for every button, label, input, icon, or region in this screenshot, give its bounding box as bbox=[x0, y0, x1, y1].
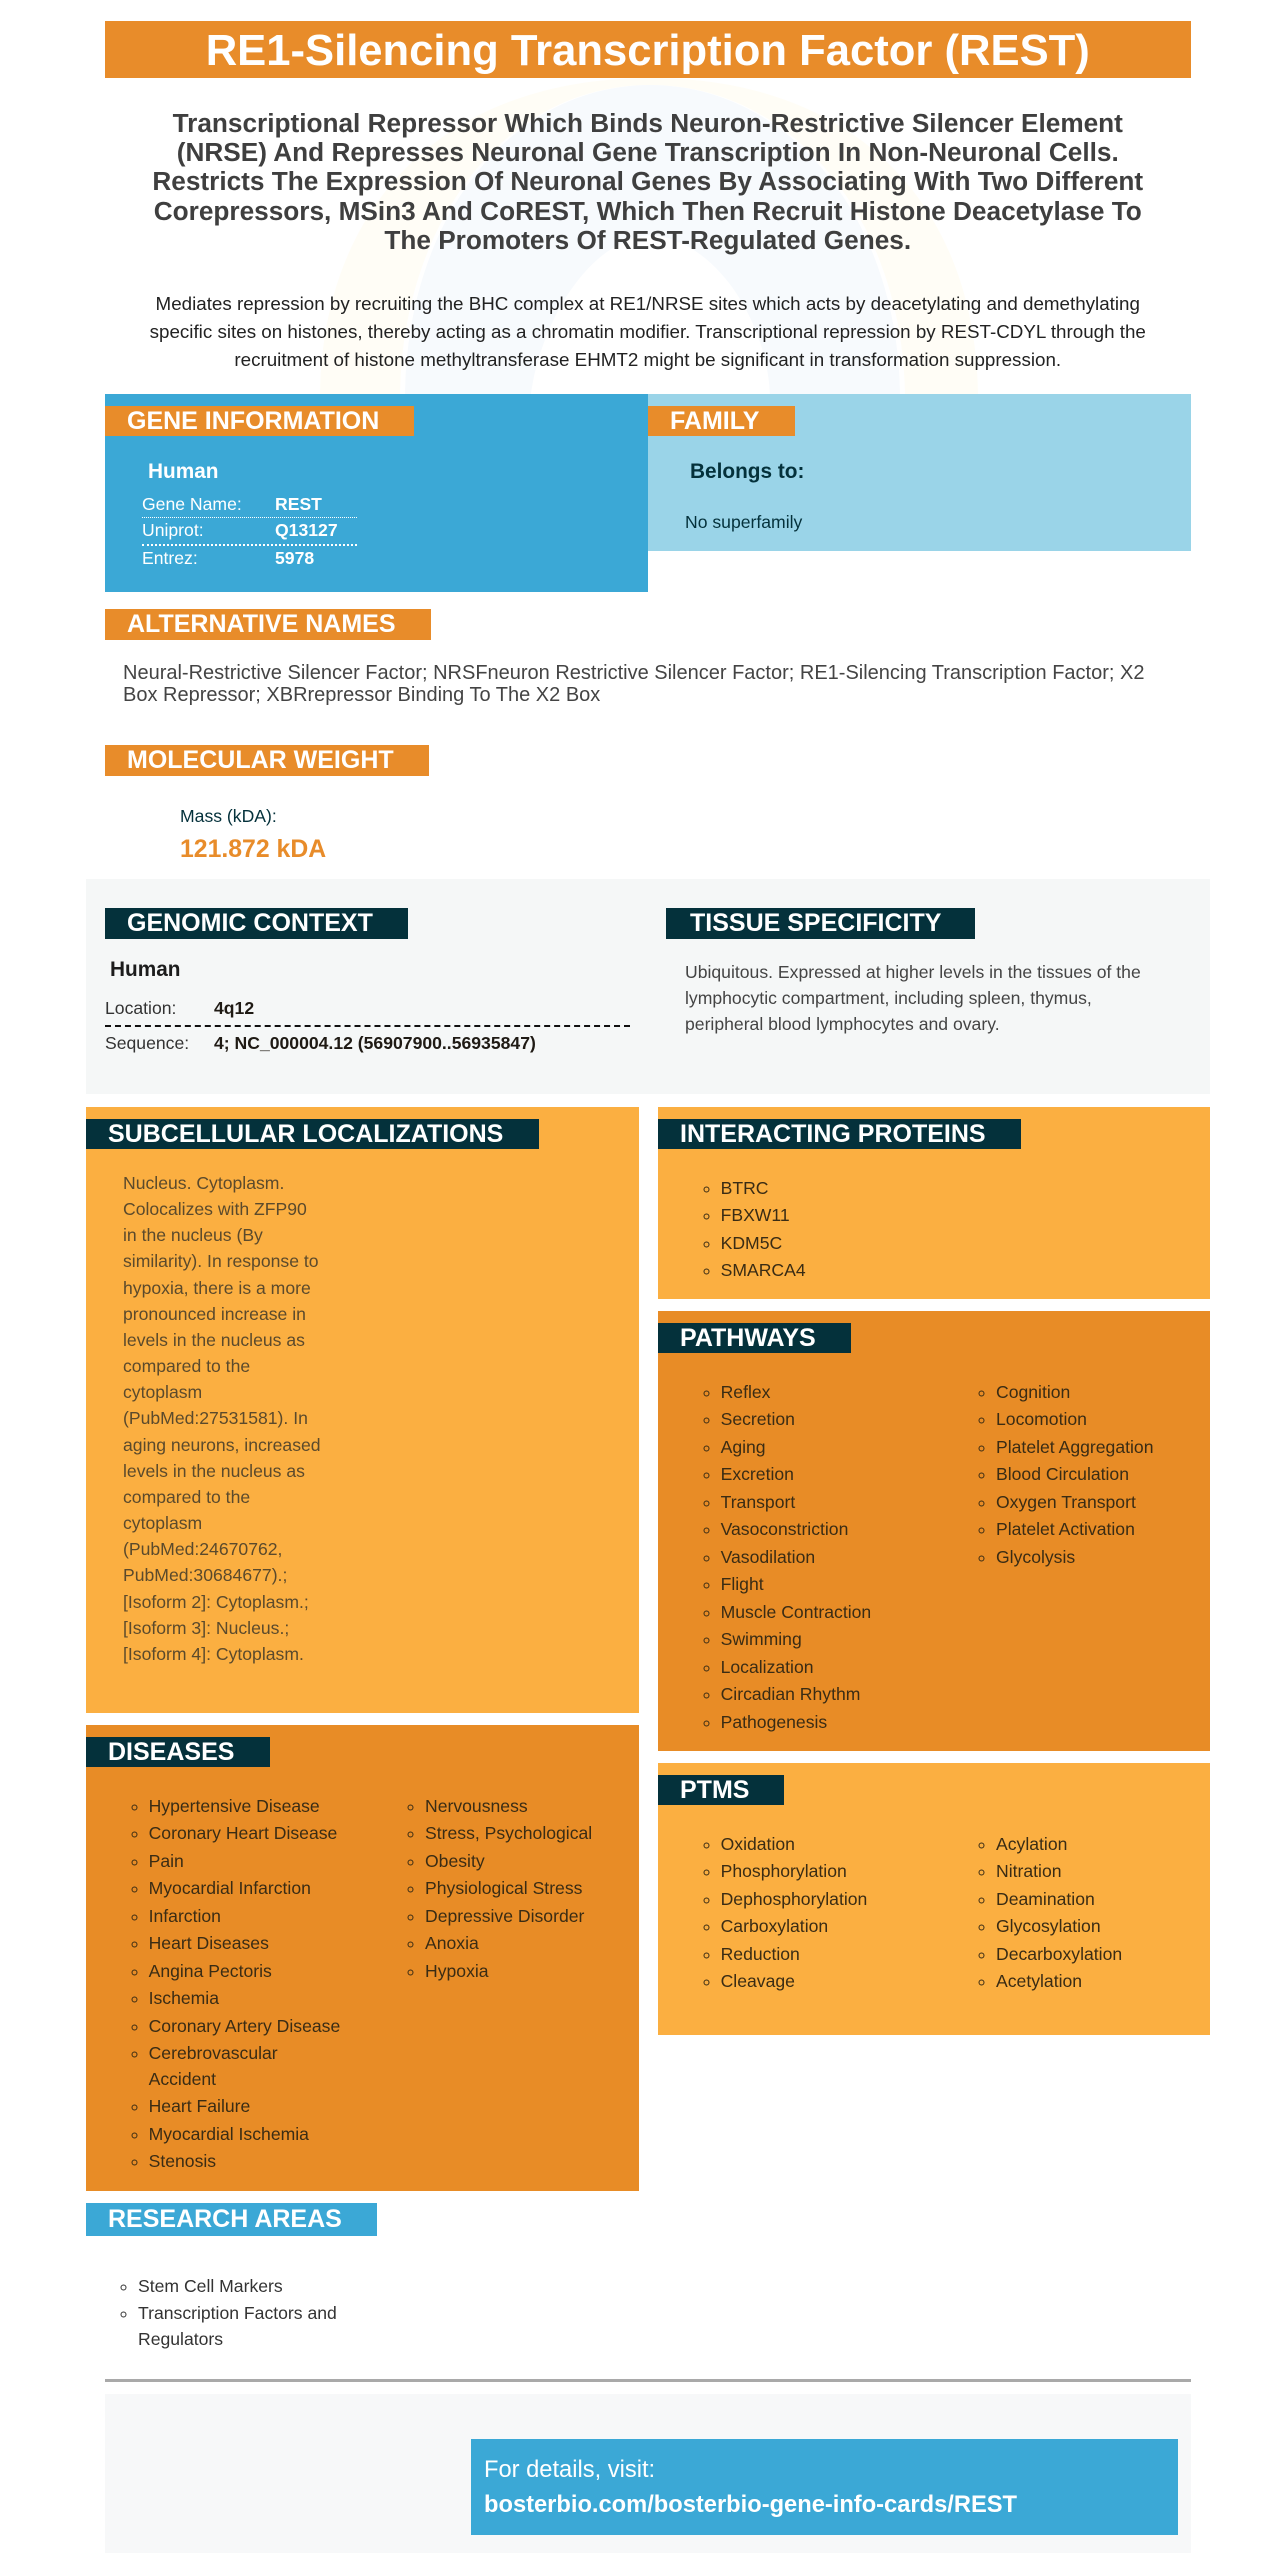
dashed divider bbox=[105, 1024, 630, 1026]
location row bbox=[105, 998, 254, 1018]
mass value: 121.872 kDA bbox=[180, 836, 326, 862]
pathway list column 1: Aging bbox=[721, 1437, 766, 1457]
localization text: levels in the nucleus as bbox=[123, 1330, 305, 1350]
localization text: similarity). In response to bbox=[123, 1251, 319, 1271]
heading: diseases: DISEASES bbox=[108, 1738, 234, 1766]
uniprot row bbox=[142, 520, 357, 546]
pathway list column 1: Vasodilation bbox=[721, 1547, 815, 1567]
localization text bbox=[123, 1173, 321, 1664]
localization text: levels in the nucleus as bbox=[123, 1461, 305, 1481]
alternative names text bbox=[123, 662, 1144, 706]
pathway list column 2: Oxygen Transport bbox=[996, 1492, 1136, 1512]
heading: alternative names: ALTERNATIVE NAMES bbox=[127, 610, 396, 638]
tissue specificity text: peripheral blood lymphocytes and ovary. bbox=[685, 1014, 1000, 1034]
heading: pathways bbox=[658, 1323, 851, 1353]
subtitle: The Promoters Of REST-Regulated Genes. bbox=[384, 225, 911, 255]
disease list column 1: Coronary Heart Disease bbox=[149, 1823, 337, 1843]
disease list column 1: Ischemia bbox=[149, 1988, 219, 2008]
description paragraph: recruitment of histone methyltransferase EHMT2 might be significant in transformation suppression. bbox=[234, 349, 1061, 370]
panel: pathways bbox=[658, 1311, 1210, 1751]
heading: pathways: PATHWAYS bbox=[680, 1324, 816, 1352]
disease list column 2: Physiological Stress bbox=[425, 1878, 582, 1898]
sequence row bbox=[105, 1033, 536, 1053]
url: bosterbio.com/bosterbio-gene-info-cards/REST bbox=[484, 2492, 1017, 2518]
disease list column 2: Hypoxia bbox=[425, 1961, 489, 1981]
heading: ptms: PTMS bbox=[680, 1776, 749, 1804]
disease list column 2: Depressive Disorder bbox=[425, 1906, 584, 1926]
location row: Location: bbox=[105, 998, 176, 1018]
subtitle: Transcriptional Repressor Which Binds Neuron-Restrictive Silencer Element bbox=[173, 108, 1123, 138]
heading: genomic context: GENOMIC CONTEXT bbox=[127, 909, 373, 937]
disease list column 1: Heart Diseases bbox=[149, 1933, 269, 1953]
disease list column 2: Stress, Psychological bbox=[425, 1823, 592, 1843]
subtitle: (NRSE) And Represses Neuronal Gene Transcription In Non-Neuronal Cells. bbox=[177, 137, 1119, 167]
localization text: hypoxia, there is a more bbox=[123, 1278, 311, 1298]
gene name row: REST bbox=[275, 494, 322, 514]
panel: ptms bbox=[658, 1763, 1210, 2035]
pathway list column 1: Vasoconstriction bbox=[721, 1519, 848, 1539]
gene name row bbox=[142, 494, 357, 518]
localization text: compared to the bbox=[123, 1487, 250, 1507]
localization text: aging neurons, increased bbox=[123, 1435, 321, 1455]
research areas list bbox=[120, 2276, 337, 2349]
localization text: (PubMed:27531581). In bbox=[123, 1408, 308, 1428]
disease list column 1: Accident bbox=[149, 2069, 216, 2089]
description paragraph: specific sites on histones, thereby acting as a chromatin modifier. Transcriptional repression by REST-CDYL through the bbox=[150, 321, 1146, 342]
localization text: [Isoform 4]: Cytoplasm. bbox=[123, 1644, 304, 1664]
disease list column 1: Coronary Artery Disease bbox=[149, 2016, 340, 2036]
disease list column 1: Heart Failure bbox=[149, 2096, 250, 2116]
panel: genomic context and tissue specificity: 4; NC_000004.12 (56907900..56935847) bbox=[214, 1033, 536, 1053]
entrez row: 5978 bbox=[275, 548, 314, 568]
family value: No superfamily bbox=[685, 512, 802, 532]
subtitle: Corepressors, MSin3 And CoREST, Which Then Recruit Histone Deacetylase To bbox=[154, 196, 1142, 226]
ptm list column 1 bbox=[704, 1834, 867, 1991]
disease list column 2: Obesity bbox=[425, 1851, 485, 1871]
panel: interacting proteins bbox=[658, 1107, 1210, 1299]
description paragraph: Mediates repression by recruiting the BHC complex at RE1/NRSE sites which acts by deacetylating and demethylating bbox=[156, 293, 1140, 314]
ptm list column 2: Acetylation bbox=[996, 1971, 1082, 1991]
ptm list column 1: Dephosphorylation bbox=[721, 1889, 867, 1909]
pathway list column 1: Circadian Rhythm bbox=[721, 1684, 860, 1704]
localization text: Colocalizes with ZFP90 bbox=[123, 1199, 307, 1219]
ptm list column 2: Glycosylation bbox=[996, 1916, 1101, 1936]
pathway list column 1: Muscle Contraction bbox=[721, 1602, 871, 1622]
tissue specificity text: lymphocytic compartment, including spleen, thymus, bbox=[685, 988, 1092, 1008]
heading: molecular weight: MOLECULAR WEIGHT bbox=[127, 746, 394, 774]
disease list column 1: Hypertensive Disease bbox=[149, 1796, 320, 1816]
callout: visit link bbox=[471, 2438, 1178, 2534]
belongs to label: Belongs to: bbox=[690, 460, 804, 483]
localization text: PubMed:30684677).; bbox=[123, 1565, 287, 1585]
localization text: Nucleus. Cytoplasm. bbox=[123, 1173, 284, 1193]
subtitle bbox=[152, 108, 1143, 255]
localization text: pronounced increase in bbox=[123, 1304, 306, 1324]
heading: family: FAMILY bbox=[670, 407, 759, 435]
disease list column 1: Myocardial Ischemia bbox=[149, 2124, 309, 2144]
ptm list column 2: Decarboxylation bbox=[996, 1944, 1122, 1964]
uniprot row: Q13127 bbox=[275, 520, 338, 540]
pathway list column 2 bbox=[978, 1382, 1153, 1567]
alternative names text: Box Repressor; XBRrepressor Binding To The X2 Box bbox=[123, 684, 600, 706]
tissue specificity text bbox=[685, 962, 1141, 1034]
localization text: [Isoform 3]: Nucleus.; bbox=[123, 1618, 289, 1638]
pathway list column 2: Locomotion bbox=[996, 1409, 1087, 1429]
heading: interacting proteins: INTERACTING PROTEINS bbox=[680, 1120, 986, 1148]
background watermark bbox=[320, 78, 978, 394]
disease list column 1 bbox=[132, 1796, 340, 2171]
disease list column 1: Stenosis bbox=[149, 2151, 216, 2171]
protein list: KDM5C bbox=[721, 1233, 782, 1253]
pathway list column 1: Secretion bbox=[721, 1409, 795, 1429]
tissue specificity text: Ubiquitous. Expressed at higher levels in the tissues of the bbox=[685, 962, 1141, 982]
disease list column 1: Pain bbox=[149, 1851, 184, 1871]
disease list column 1: Angina Pectoris bbox=[149, 1961, 272, 1981]
description paragraph bbox=[150, 293, 1146, 370]
localization text: in the nucleus (By bbox=[123, 1225, 263, 1245]
gene name row: Gene Name: bbox=[142, 494, 242, 514]
ptm list column 1: Reduction bbox=[721, 1944, 800, 1964]
entrez row: Entrez: bbox=[142, 548, 198, 568]
pathway list column 1: Localization bbox=[721, 1657, 814, 1677]
pathway list column 2: Blood Circulation bbox=[996, 1464, 1129, 1484]
localization text: compared to the bbox=[123, 1356, 250, 1376]
species label: Human bbox=[148, 460, 218, 483]
subtitle: Restricts The Expression Of Neuronal Genes By Associating With Two Different bbox=[152, 166, 1143, 196]
disease list column 2: Anoxia bbox=[425, 1933, 479, 1953]
heading: tissue specificity: TISSUE SPECIFICITY bbox=[690, 909, 941, 937]
ptm list column 1: Carboxylation bbox=[721, 1916, 828, 1936]
disease list column 1: Infarction bbox=[149, 1906, 221, 1926]
ptm list column 1: Cleavage bbox=[721, 1971, 795, 1991]
disease list column 2: Nervousness bbox=[425, 1796, 528, 1816]
species label: Human bbox=[110, 958, 180, 981]
footer divider bbox=[105, 2379, 1190, 2382]
research areas list: Stem Cell Markers bbox=[138, 2276, 283, 2296]
pathway list column 2: Platelet Activation bbox=[996, 1519, 1135, 1539]
panel: genomic context and tissue specificity bbox=[86, 879, 1210, 1094]
heading: subcellular localizations: SUBCELLULAR LOCALIZATIONS bbox=[108, 1120, 503, 1148]
sequence row: Sequence: bbox=[105, 1033, 189, 1053]
ptm list column 2: Deamination bbox=[996, 1889, 1095, 1909]
heading: research areas bbox=[86, 2203, 377, 2236]
pathway list column 1: Flight bbox=[721, 1574, 764, 1594]
protein list: SMARCA4 bbox=[721, 1260, 806, 1280]
localization text: (PubMed:24670762, bbox=[123, 1539, 282, 1559]
disease list column 1: Cerebrovascular bbox=[149, 2043, 278, 2063]
localization text: [Isoform 2]: Cytoplasm.; bbox=[123, 1592, 309, 1612]
ptm list column 2: Acylation bbox=[996, 1834, 1067, 1854]
heading: family bbox=[648, 406, 794, 436]
pathway list column 2: Glycolysis bbox=[996, 1547, 1075, 1567]
entrez row bbox=[142, 548, 314, 568]
visit label: For details, visit: bbox=[484, 2456, 655, 2482]
panel: diseases bbox=[86, 1725, 638, 2191]
disease list column 1: Myocardial Infarction bbox=[149, 1878, 311, 1898]
panel: subcellular localizations bbox=[86, 1107, 638, 1713]
uniprot row: Uniprot: bbox=[142, 520, 204, 540]
protein list: FBXW11 bbox=[721, 1205, 790, 1225]
panel: genomic context and tissue specificity: 4q12 bbox=[214, 998, 254, 1018]
pathway list column 1: Reflex bbox=[721, 1382, 770, 1402]
pathway list column 1: Excretion bbox=[721, 1464, 794, 1484]
disease list column 2 bbox=[408, 1796, 592, 1981]
heading: research areas: RESEARCH AREAS bbox=[108, 2205, 342, 2233]
heading: ptms bbox=[658, 1775, 784, 1805]
panel: gene information bbox=[105, 394, 648, 592]
alternative names text: Neural-Restrictive Silencer Factor; NRSFneuron Restrictive Silencer Factor; RE1-Silencing Transcription Factor; X2 bbox=[123, 662, 1144, 684]
panel: footer bbox=[105, 2394, 1190, 2553]
mass label: Mass (kDA): bbox=[180, 806, 277, 826]
pathway list column 1: Transport bbox=[721, 1492, 795, 1512]
pathway list column 2: Platelet Aggregation bbox=[996, 1437, 1153, 1457]
localization text: cytoplasm bbox=[123, 1513, 202, 1533]
research areas list: Regulators bbox=[138, 2329, 223, 2349]
ptm list column 1: Phosphorylation bbox=[721, 1861, 847, 1881]
pathway list column 1: Pathogenesis bbox=[721, 1712, 827, 1732]
protein list bbox=[704, 1178, 806, 1280]
ptm list column 1: Oxidation bbox=[721, 1834, 795, 1854]
heading: gene information: GENE INFORMATION bbox=[127, 407, 379, 435]
research areas list: Transcription Factors and bbox=[138, 2303, 337, 2323]
pathway list column 1: Swimming bbox=[721, 1629, 802, 1649]
pathway list column 1 bbox=[704, 1382, 871, 1732]
pathway list column 2: Cognition bbox=[996, 1382, 1070, 1402]
ptm list column 2: Nitration bbox=[996, 1861, 1062, 1881]
ptm list column 2 bbox=[978, 1834, 1122, 1991]
title banner bbox=[105, 21, 1190, 78]
title banner: RE1-Silencing Transcription Factor (REST) bbox=[206, 27, 1090, 75]
panel: family bbox=[648, 394, 1190, 551]
protein list: BTRC bbox=[721, 1178, 768, 1198]
heading: diseases bbox=[86, 1737, 270, 1767]
localization text: cytoplasm bbox=[123, 1382, 202, 1402]
